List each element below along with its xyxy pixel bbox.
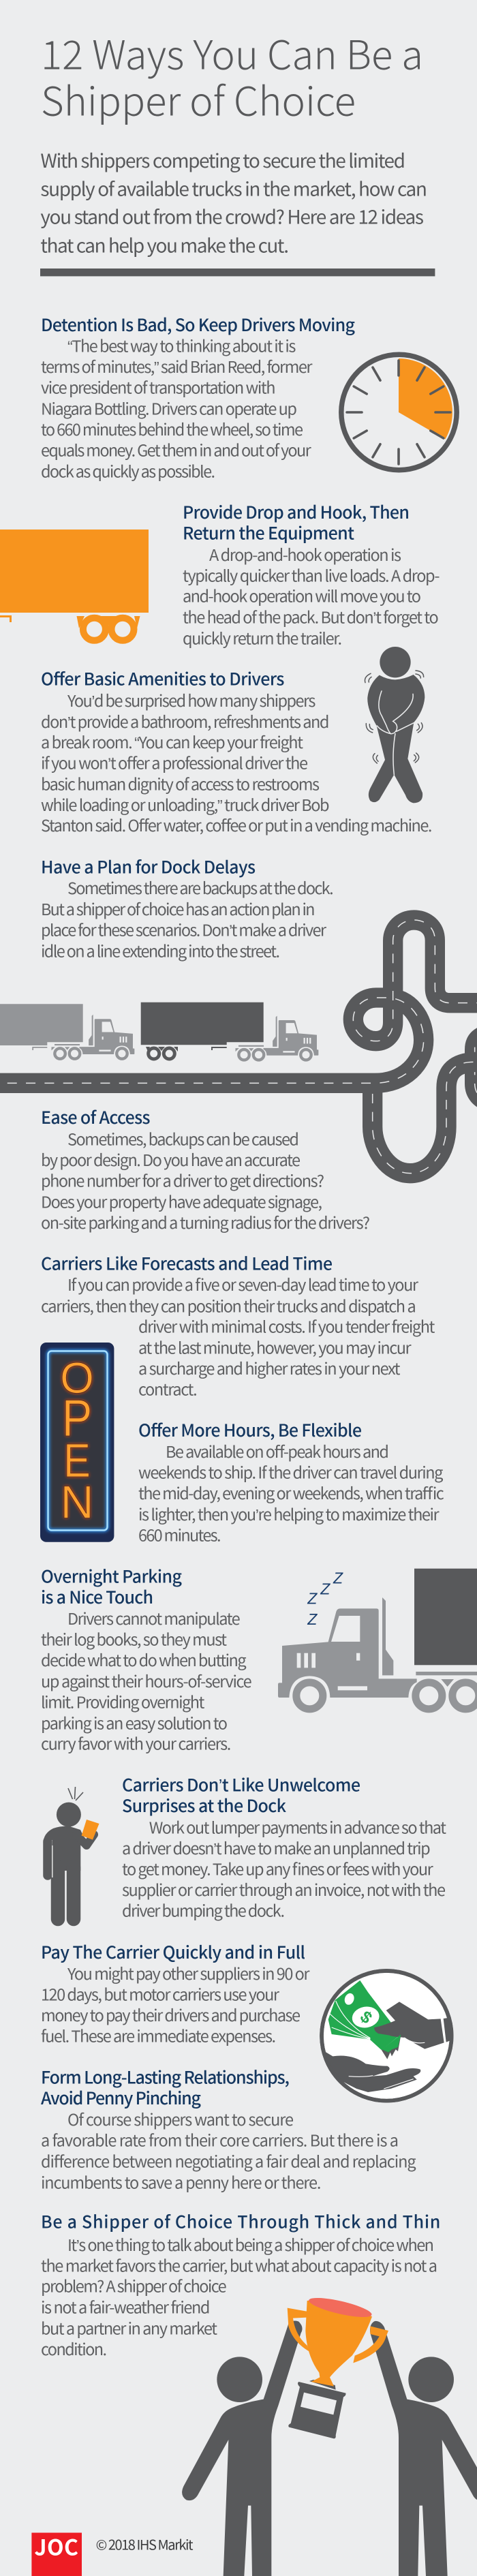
heading: detention: Detention Is Bad, So Keep Drivers Moving bbox=[41, 312, 356, 337]
heading: drop and hook: Provide Drop and Hook, Then bbox=[183, 500, 410, 524]
heading: thick and thin: Be a Shipper of Choice Through Thick and Thin bbox=[41, 2209, 440, 2234]
heading: overnight parking: is a Nice Touch bbox=[41, 1584, 153, 1609]
text: overnight parking: up against their hours-of-service bbox=[41, 1669, 252, 1692]
panel: thick and thin bbox=[41, 2209, 477, 2576]
text: drop and hook: quickly return the trailer. bbox=[183, 626, 342, 649]
text: pay quickly: money to pay their drivers and purchase bbox=[41, 2003, 301, 2026]
trophy bbox=[288, 2294, 388, 2438]
text: forecasts: a surcharge and higher rates in your next bbox=[138, 1356, 401, 1379]
text: pay quickly: You might pay other suppliers in 90 or bbox=[67, 1961, 310, 1984]
text: thick and thin: problem? A shipper of choice bbox=[41, 2274, 227, 2297]
panel: overnight parking bbox=[41, 1563, 477, 1754]
icon: sleeping z letters: Z bbox=[307, 1610, 318, 1628]
text: unwelcome surprises bbox=[122, 1815, 446, 1922]
text: unwelcome surprises: a driver doesn’t have to make an unplanned trip bbox=[122, 1836, 431, 1859]
text: overnight parking: limit. Providing overnight bbox=[41, 1690, 205, 1713]
panel: more hours bbox=[138, 1417, 444, 1546]
panel: long-lasting relationships bbox=[41, 2065, 416, 2193]
icon: neon open sign: N bbox=[60, 1476, 94, 1528]
text: thick and thin: is not a fair-weather friend bbox=[41, 2295, 210, 2318]
icon: neon open sign: N bbox=[60, 1476, 94, 1528]
icon: neon open sign: O bbox=[60, 1353, 94, 1402]
text: amenities bbox=[41, 688, 432, 836]
text: more hours bbox=[138, 1439, 444, 1546]
icon: parked truck bbox=[278, 1569, 477, 1709]
text: dock delays: place for these scenarios. Don’t make a driver bbox=[41, 918, 327, 941]
text: dock delays: Sometimes there are backups at the dock. bbox=[67, 876, 334, 899]
panel: pay quickly bbox=[41, 1939, 452, 2101]
text: drop and hook: and-hook operation will move you to bbox=[183, 583, 421, 607]
icon: two people raising a trophy bbox=[182, 2294, 477, 2576]
icon: sleeping z letters: Z bbox=[333, 1569, 343, 1586]
text: unwelcome surprises: Work out lumper payments in advance so that bbox=[149, 1815, 446, 1838]
text: more hours: 660 minutes. bbox=[138, 1523, 221, 1546]
panel: unwelcome surprises bbox=[43, 1772, 446, 1926]
text: thick and thin: condition. bbox=[41, 2337, 107, 2360]
text: overnight parking: Drivers cannot manipulate bbox=[67, 1606, 241, 1629]
text: overnight parking bbox=[41, 1606, 252, 1754]
heading: unwelcome surprises bbox=[122, 1772, 360, 1818]
text: drop and hook: typically quicker than live loads. A drop- bbox=[183, 563, 440, 586]
icon: sleeping z letters: Z bbox=[307, 1590, 318, 1608]
text: relationships: difference between negotiating a fair deal and replacing bbox=[41, 2149, 416, 2173]
text: overnight parking: curry favor with your carriers. bbox=[41, 1731, 231, 1754]
heading: relationships bbox=[41, 2065, 290, 2110]
heading: overnight parking: Overnight Parking bbox=[41, 1563, 183, 1588]
title bbox=[41, 24, 423, 127]
text: unwelcome surprises: supplier or carrier through an invoice, not with the bbox=[122, 1877, 446, 1901]
left person bbox=[182, 2321, 303, 2576]
intro text: With shippers competing to secure the limited bbox=[40, 147, 405, 174]
text: relationships: a favorable rate from their core carriers. But there is a bbox=[41, 2128, 399, 2151]
text: thick and thin: the market favors the carrier, but what about capacity is not a bbox=[41, 2254, 437, 2277]
text: relationships: incumbents to save a penny here or there. bbox=[41, 2170, 321, 2193]
heading: unwelcome surprises: Carriers Don’t Like Unwelcome bbox=[122, 1772, 360, 1796]
panel: dock delays bbox=[0, 854, 477, 1174]
icon: queued truck, light grey bbox=[0, 1004, 134, 1059]
heading: drop and hook: Return the Equipment bbox=[183, 521, 354, 545]
intro text: that can help you make the cut. bbox=[40, 231, 289, 258]
text: ease of access: Does your property have adequate signage, bbox=[41, 1189, 322, 1212]
text: more hours: is lighter, then you’re helping to maximize their bbox=[138, 1502, 440, 1525]
text: drop and hook: A drop-and-hook operation is bbox=[209, 542, 401, 566]
icon: winding road bbox=[0, 920, 477, 1174]
heading: relationships: Avoid Penny Pinching bbox=[41, 2085, 202, 2110]
text: relationships bbox=[41, 2107, 416, 2193]
intro text: you stand out from the crowd? Here are 12 ideas bbox=[40, 203, 424, 230]
text: forecasts: at the last minute, however, you may incur bbox=[138, 1335, 412, 1358]
title: 12 Ways You Can Be a bbox=[41, 24, 423, 81]
text: thick and thin: but a partner in any market bbox=[41, 2316, 217, 2340]
title: Shipper of Choice bbox=[41, 70, 356, 127]
text: pay quickly: fuel. These are immediate expenses. bbox=[41, 2024, 276, 2047]
text: detention: dock as quickly as possible. bbox=[41, 459, 215, 482]
heading: pay quickly: Pay The Carrier Quickly and in Full bbox=[41, 1939, 305, 1964]
icon: hands exchanging money bbox=[322, 1971, 452, 2101]
text: ease of access: Sometimes, backups can be caused bbox=[67, 1126, 299, 1150]
text: amenities: Stanton said. Offer water, coffee or put in a vending machine. bbox=[41, 813, 432, 836]
text: forecasts: driver with minimal costs. If you tender freight bbox=[138, 1314, 435, 1337]
heading: relationships: Form Long-Lasting Relationships, bbox=[41, 2065, 290, 2089]
text: amenities: a break room. “You can keep your freight bbox=[41, 730, 303, 753]
heading: ease of access: Ease of Access bbox=[41, 1105, 150, 1129]
text: more hours: the mid-day, evening or weekends, when traffic bbox=[138, 1481, 444, 1504]
right person bbox=[370, 2321, 477, 2576]
icon: neon open sign bbox=[40, 1343, 114, 1542]
panel: ease of access bbox=[41, 1105, 370, 1233]
icon: neon open sign: E bbox=[63, 1433, 91, 1487]
intro text: supply of available trucks in the market, how can bbox=[40, 174, 427, 202]
text: more hours: weekends to ship. If the driver can travel during bbox=[138, 1460, 443, 1484]
text: amenities: if you won’t offer a professional driver the bbox=[41, 751, 308, 774]
text: thick and thin: It’s one thing to talk about being a shipper of choice when bbox=[67, 2233, 434, 2256]
text: amenities: don’t provide a bathroom, refreshments and bbox=[41, 709, 330, 733]
icon: sleeping z letters: Z bbox=[320, 1580, 330, 1597]
text: overnight parking: decide what to do when butting bbox=[41, 1648, 247, 1671]
text: detention: “The best way to thinking about it is bbox=[67, 333, 296, 356]
text: pay quickly bbox=[41, 1961, 310, 2047]
heading: forecasts: Carriers Like Forecasts and Lead Time bbox=[41, 1251, 333, 1276]
icon: queued truck, dark trailer bbox=[141, 1002, 318, 1060]
text: detention: Niagara Bottling. Drivers can operate up bbox=[41, 396, 297, 419]
text: ease of access: phone number for a driver to get directions? bbox=[41, 1168, 324, 1191]
text: pay quickly: 120 days, but motor carriers use your bbox=[41, 1982, 280, 2005]
text: thick and thin bbox=[41, 2233, 437, 2360]
heading: more hours: Offer More Hours, Be Flexible bbox=[138, 1417, 362, 1442]
heading: overnight parking bbox=[41, 1563, 183, 1609]
text: overnight parking: parking is an easy solution to bbox=[41, 1711, 228, 1734]
text: detention: terms of minutes,” said Brian Reed, former bbox=[41, 354, 313, 378]
icon: clock bbox=[341, 354, 457, 470]
text: amenities: while loading or unloading,” truck driver Bob bbox=[41, 793, 330, 816]
icon: neon open sign: E bbox=[63, 1433, 91, 1487]
heading: unwelcome surprises: Surprises at the Dock bbox=[122, 1793, 287, 1818]
text: more hours: Be available on off-peak hours and bbox=[166, 1439, 389, 1462]
text: detention: equals money. Get them in and out of your bbox=[41, 438, 312, 461]
icon: neon open sign: P bbox=[62, 1390, 92, 1447]
panel: detention bbox=[41, 312, 457, 482]
icon: orange trailer bbox=[0, 530, 149, 641]
heading: drop and hook bbox=[183, 500, 410, 545]
text: dock delays: But a shipper of choice has an action plan in bbox=[41, 897, 315, 920]
text: ease of access bbox=[41, 1126, 370, 1233]
footer: copyright: © 2018 IHS Markit bbox=[96, 2534, 194, 2554]
icon: neon open sign: P bbox=[62, 1390, 92, 1447]
icon: driver looking at a bill bbox=[43, 1787, 99, 1926]
text: forecasts: If you can provide a five or seven-day lead time to your bbox=[67, 1272, 419, 1295]
text: dock delays bbox=[41, 876, 334, 962]
footer logo: JOC bbox=[31, 2530, 82, 2576]
text: relationships: Of course shippers want to secure bbox=[67, 2107, 294, 2130]
text: unwelcome surprises: to get money. Take up any fines or fees with your bbox=[122, 1856, 434, 1880]
panel: amenities bbox=[41, 647, 432, 836]
text: drop and hook bbox=[183, 542, 440, 649]
icon: sleeping z letters bbox=[307, 1569, 343, 1628]
text: forecasts bbox=[41, 1272, 435, 1400]
text: forecasts: contract. bbox=[138, 1377, 198, 1400]
text: forecasts: carriers, then they can position their trucks and dispatch a bbox=[41, 1293, 416, 1317]
text: detention: vice president of transportation with bbox=[41, 375, 275, 398]
text: ease of access: on-site parking and a turning radius for the drivers? bbox=[41, 1210, 370, 1233]
text: drop and hook: the head of the pack. But don’t forget to bbox=[183, 604, 439, 628]
text: detention: to 660 minutes behind the wheel, so time bbox=[41, 417, 303, 440]
intro text bbox=[40, 147, 427, 258]
text: dock delays: idle on a line extending into the street. bbox=[41, 939, 280, 962]
text: overnight parking: their log books, so they must bbox=[41, 1627, 227, 1651]
panel: forecasts and lead time bbox=[41, 1251, 435, 1400]
heading: amenities: Offer Basic Amenities to Drivers bbox=[41, 666, 284, 691]
footer logo: JOC: JOC bbox=[34, 2530, 78, 2562]
heading: dock delays: Have a Plan for Dock Delays bbox=[41, 854, 256, 878]
text: detention bbox=[41, 333, 313, 482]
panel: drop and hook bbox=[0, 500, 440, 649]
text: amenities: basic human dignity of access to restrooms bbox=[41, 771, 320, 795]
text: unwelcome surprises: driver bumping the dock. bbox=[122, 1899, 285, 1922]
icon: neon open sign: O bbox=[60, 1353, 94, 1402]
icon: hands exchanging money: $ bbox=[356, 2008, 375, 2028]
icon: person needing a restroom bbox=[365, 647, 425, 803]
text: ease of access: by poor design. Do you have an accurate bbox=[41, 1148, 301, 1171]
text: amenities: You’d be surprised how many shippers bbox=[67, 688, 316, 711]
